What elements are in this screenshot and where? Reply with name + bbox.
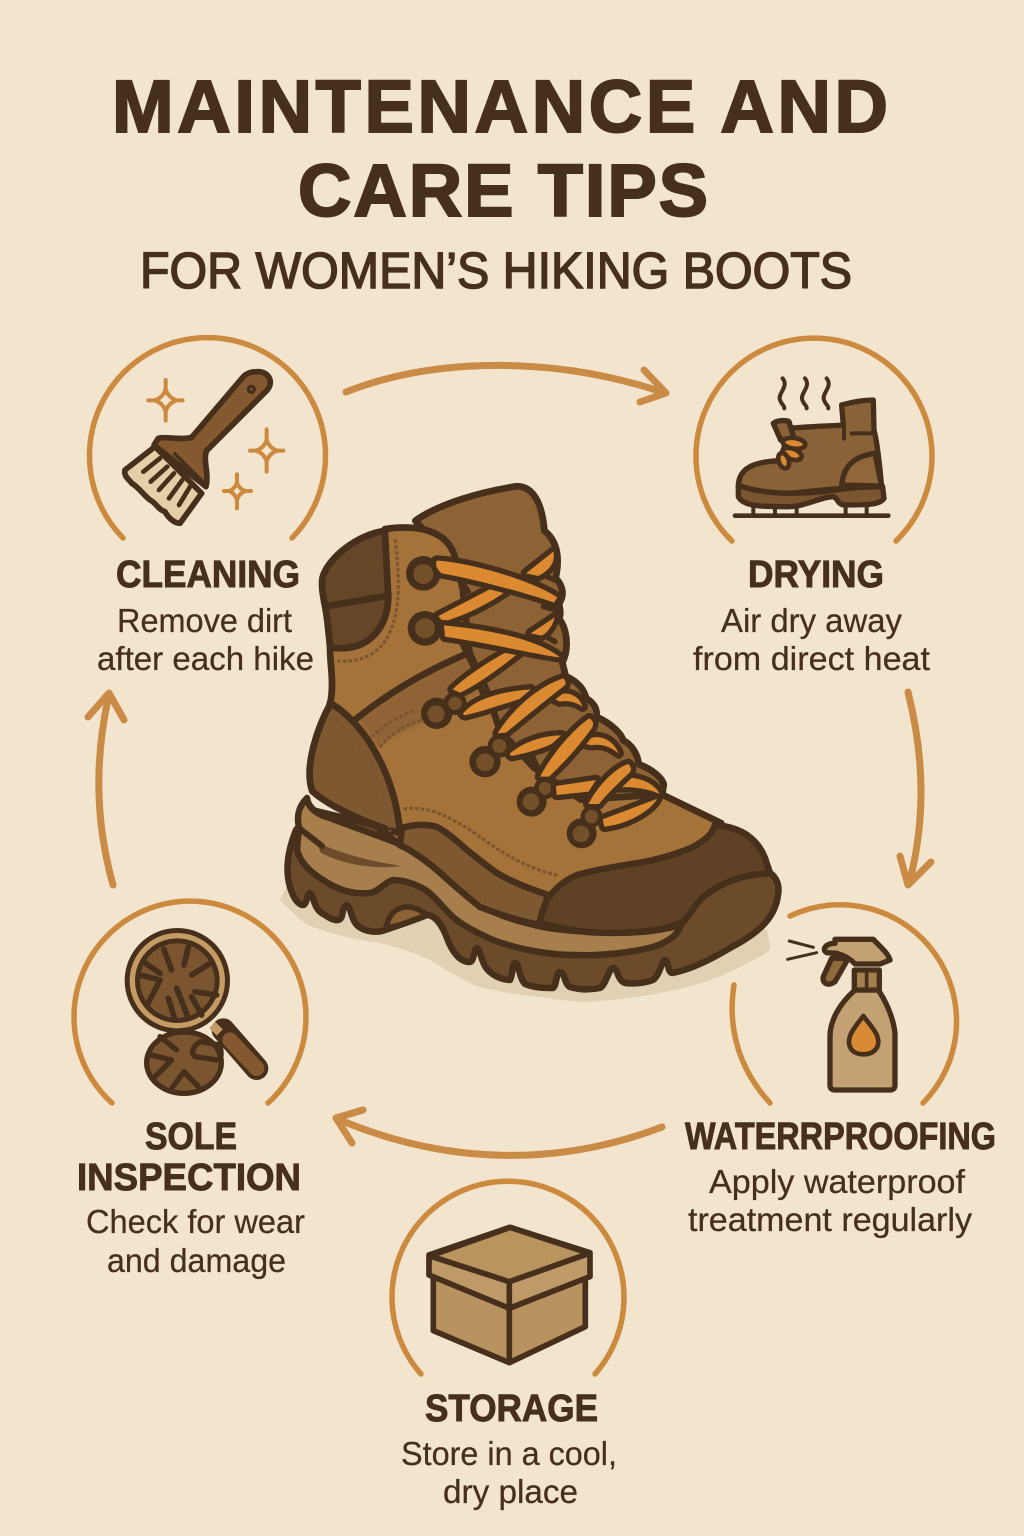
drying heading: DRYING (748, 554, 884, 596)
midsole (297, 798, 681, 955)
drying ring (696, 338, 932, 541)
icon: magnifying glass over sole (125, 928, 257, 1093)
panel: sole inspection (74, 901, 306, 1279)
cleaning description: Remove dirt (117, 602, 292, 639)
heel counter (310, 703, 400, 833)
heel arch window (386, 907, 427, 928)
outsole and toe bumper (288, 810, 779, 989)
cleaning ring (90, 338, 325, 538)
storage ring (392, 1181, 624, 1374)
title: MAINTENANCE AND (112, 65, 888, 148)
sole inspection description: and damage (107, 1242, 286, 1279)
icon: boot drying with steam (735, 378, 888, 516)
title: CARE TIPS (298, 149, 708, 232)
sole inspection ring (74, 901, 306, 1103)
panel seam (354, 653, 469, 720)
storage description: dry place (443, 1473, 578, 1510)
eyelets (406, 556, 603, 848)
drying description: Air dry away (721, 602, 902, 639)
cleaning description: after each hike (97, 640, 314, 677)
arrow: waterproofing to sole inspection (336, 1110, 662, 1155)
collar padding (322, 531, 388, 648)
central hiking boot illustration (280, 486, 779, 1002)
icon: brush with sparkles (125, 372, 283, 523)
main upper (311, 528, 721, 909)
ground shadow (280, 860, 770, 1002)
icon: spray bottle (788, 939, 895, 1090)
mudguard band (400, 825, 548, 925)
waterproofing description: Apply waterproof (709, 1163, 966, 1200)
sole inspection heading: SOLE (145, 1116, 237, 1158)
stitching (330, 539, 559, 876)
sole inspection description: Check for wear (86, 1203, 305, 1240)
toe cap (540, 825, 770, 933)
panel: storage (392, 1181, 624, 1510)
sole inspection heading (77, 1116, 301, 1199)
arrow: drying to waterproofing (900, 692, 931, 885)
storage description (401, 1435, 617, 1510)
darker mid panel (359, 655, 483, 747)
arrow: cleaning to drying (346, 365, 666, 402)
orange lace segments (436, 552, 660, 827)
panel: drying (693, 338, 932, 677)
cleaning heading: CLEANING (116, 554, 300, 596)
midsole crease (318, 843, 401, 867)
arrow: sole inspection to cleaning (88, 693, 124, 885)
storage description: Store in a cool, (401, 1435, 617, 1472)
title (112, 65, 888, 299)
subtitle: FOR WOMEN’S HIKING BOOTS (140, 242, 852, 299)
sole inspection description (86, 1203, 305, 1279)
storage heading: STORAGE (425, 1388, 598, 1430)
tongue and lace area (415, 486, 664, 838)
under-lace strands (458, 575, 592, 810)
panel: waterproofing (685, 905, 996, 1238)
laces and eyelets (406, 552, 660, 848)
drying description (693, 602, 930, 677)
cleaning description (97, 602, 314, 677)
waterproofing description: treatment regularly (688, 1201, 973, 1238)
upper boot (310, 486, 721, 909)
waterproofing description (688, 1163, 973, 1238)
drying description: from direct heat (693, 640, 930, 677)
sole inspection heading: INSPECTION (77, 1157, 301, 1199)
panel: cleaning (90, 338, 325, 677)
icon: storage box (429, 1227, 590, 1363)
waterproofing ring (732, 905, 957, 1103)
